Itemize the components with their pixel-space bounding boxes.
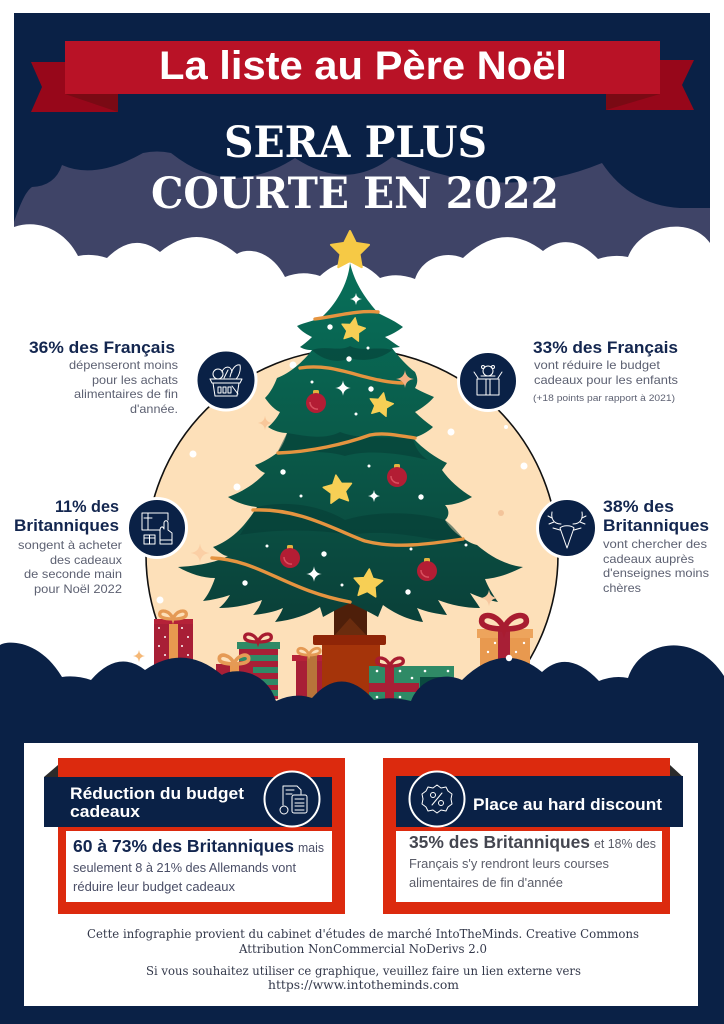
callout: 38% des Britanniques: d'enseignes moins xyxy=(603,566,709,580)
callout: 33% des Français: vont réduire le budget xyxy=(534,358,661,372)
icon: gift card and hand xyxy=(128,498,186,558)
background sparkles and snow xyxy=(133,362,556,662)
ornaments xyxy=(280,390,437,581)
gift: crimson with tan ribbon xyxy=(292,648,322,700)
callout: 11% des Britanniques: de seconde main xyxy=(24,567,122,581)
footer credit text: Cette infographie provient du cabinet d'études de marché IntoTheMinds. Creative Commons xyxy=(87,926,639,941)
callout: 11% des Britanniques xyxy=(14,497,122,596)
callout: 38% des Britanniques: cadeaux auprès xyxy=(603,552,694,566)
text: 60 to 73%: seulement 8 à 21% des Allemands vont xyxy=(73,861,297,875)
callout: 36% des Français: d'année. xyxy=(130,402,178,416)
text: 35%: Français s'y rendront leurs courses xyxy=(409,857,609,871)
title: COURTE EN 2022 xyxy=(151,169,559,219)
gift: green xyxy=(369,658,454,704)
title: SERA PLUS xyxy=(224,118,487,168)
callout: 38% des Britanniques: chères xyxy=(603,581,641,595)
tree foliage xyxy=(178,263,523,622)
text: 35% xyxy=(409,832,656,890)
callout: 36% des Français: pour les achats xyxy=(92,373,178,387)
icon: gift box with teddy xyxy=(458,352,518,410)
callout: 38% des Britanniques: 38% des xyxy=(603,497,674,516)
navy foreground clouds xyxy=(0,643,724,1024)
gift: red polka xyxy=(154,611,193,669)
footer credit text: Attribution NonCommercial NoDerivs 2.0 xyxy=(238,941,487,956)
tree snow and sparkles xyxy=(242,293,497,606)
christmas tree xyxy=(178,231,523,636)
heading: hard discount: Place au hard discount xyxy=(473,795,662,814)
moon circle xyxy=(146,349,558,761)
callout: 38% des Britanniques: vont chercher des xyxy=(603,537,707,551)
garlands xyxy=(212,312,463,602)
callout: 11% des Britanniques: songent à acheter xyxy=(18,538,122,552)
gift: orange xyxy=(477,616,533,676)
icon: discount badge xyxy=(410,772,464,826)
footer credit text xyxy=(87,926,639,992)
text: 60 to 73%: réduire leur budget cadeaux xyxy=(73,880,236,894)
text: 60 to 73%: 60 à 73% des Britanniques xyxy=(73,836,294,856)
callout: 33% des Français xyxy=(533,338,678,404)
header background xyxy=(14,13,710,293)
tree trunk xyxy=(334,600,367,636)
tree pot xyxy=(313,635,386,704)
white info panel xyxy=(24,743,698,1006)
text: 35%: alimentaires de fin d'année xyxy=(409,876,563,890)
footer credit text: Si vous souhaitez utiliser ce graphique, veuillez faire un lien externe vers xyxy=(146,963,581,978)
heading: budget reduction xyxy=(70,784,244,821)
white snow clouds xyxy=(14,224,710,300)
callout: 11% des Britanniques: pour Noël 2022 xyxy=(34,582,122,596)
panel: hard discount card xyxy=(383,758,683,914)
gift: small red xyxy=(216,655,253,694)
text: 35%: et 18% des xyxy=(594,837,656,851)
callout: 38% des Britanniques: Britanniques xyxy=(603,516,709,535)
tree shadows xyxy=(240,346,470,545)
callout: 33% des Français: cadeaux pour les enfants xyxy=(534,373,678,387)
callout: 11% des Britanniques: Britanniques xyxy=(14,516,119,535)
panel: budget reduction card xyxy=(44,758,345,914)
callout: 36% des Français: 36% des Français xyxy=(29,338,175,357)
tree stars xyxy=(322,316,395,597)
callout: 11% des Britanniques: des cadeaux xyxy=(50,553,122,567)
callout: 33% des Français: 33% des Français xyxy=(533,338,678,357)
heading: budget reduction: cadeaux xyxy=(70,802,141,821)
callout: 36% des Français xyxy=(29,338,178,416)
ribbon banner: La liste au Père Noël xyxy=(159,44,567,88)
gift: striped xyxy=(237,634,280,699)
icon: grocery basket xyxy=(196,350,256,410)
callout: 38% des Britanniques xyxy=(603,497,709,595)
callout: 11% des Britanniques: 11% des xyxy=(55,497,119,516)
text: 35%: 35% des Britanniques xyxy=(409,832,590,852)
callout: 36% des Français: alimentaires de fin xyxy=(74,387,178,401)
title xyxy=(151,118,559,219)
icon: calculator and bill xyxy=(264,772,320,826)
dusky clouds xyxy=(14,152,710,293)
icon: reindeer xyxy=(538,498,596,558)
callout: 36% des Français: dépenseront moins xyxy=(69,358,178,372)
callout: 33% des Français: (+18 points par rapport à 2021) xyxy=(533,393,675,404)
footer credit text: https://www.intotheminds.com xyxy=(268,977,459,992)
ribbon banner xyxy=(31,41,694,112)
heading: budget reduction: Réduction du budget xyxy=(70,784,244,803)
text: 60 to 73% xyxy=(73,836,324,894)
snow dot on cloud xyxy=(506,655,512,661)
text: 60 to 73%: mais xyxy=(298,841,324,855)
star on top of tree xyxy=(331,231,369,267)
